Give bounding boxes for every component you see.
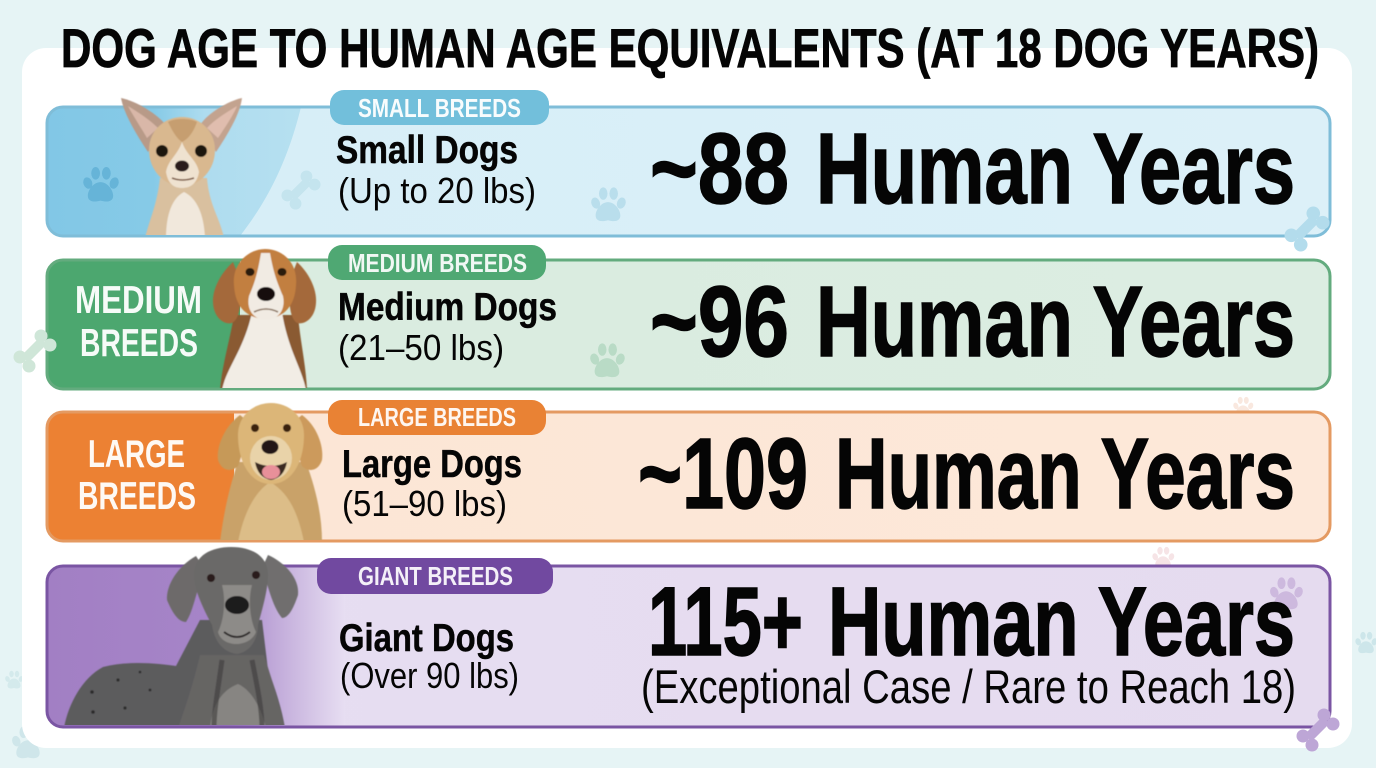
label: LARGE xyxy=(88,433,185,476)
pill: giant breeds xyxy=(317,558,553,594)
pill: small breeds: SMALL BREEDS xyxy=(358,93,521,123)
corner bone xyxy=(1285,207,1329,251)
label: MEDIUM xyxy=(75,279,202,322)
paw xyxy=(590,187,627,221)
background paw left xyxy=(4,671,24,688)
panel: small breeds xyxy=(47,90,1330,251)
faint paw above large row xyxy=(1232,397,1254,416)
bone xyxy=(281,170,321,210)
human years value: ~109 xyxy=(638,418,808,530)
icon: beagle xyxy=(213,249,316,390)
left colour block xyxy=(47,107,301,236)
faint paw above giant row xyxy=(1151,547,1175,568)
paw in colour block xyxy=(82,167,120,202)
pill: large breeds: LARGE BREEDS xyxy=(358,402,516,432)
corner bone xyxy=(1296,708,1340,752)
pill: large breeds xyxy=(328,400,546,435)
paw xyxy=(589,343,626,377)
human years value xyxy=(648,567,1295,676)
label: BREEDS xyxy=(80,322,198,365)
panel: giant breeds xyxy=(47,547,1340,752)
breed name: Large Dogs xyxy=(342,443,522,486)
row background xyxy=(47,107,1330,236)
breed name: Small Dogs xyxy=(336,129,518,172)
left colour block xyxy=(47,260,240,389)
weight range: (Over 90 lbs) xyxy=(340,655,519,696)
weight range: (51–90 lbs) xyxy=(342,483,507,524)
human years value xyxy=(638,418,1295,530)
icon: great dane xyxy=(64,547,298,728)
breed name: Medium Dogs xyxy=(338,286,557,329)
background paw bottom left xyxy=(11,726,46,758)
weight range: (21–50 lbs) xyxy=(338,327,504,368)
human years value: ~96 xyxy=(650,266,789,378)
human years value: ~88 xyxy=(650,113,789,225)
panel: large breeds xyxy=(47,400,1330,542)
pill: medium breeds: MEDIUM BREEDS xyxy=(348,248,527,278)
background paw right xyxy=(1354,632,1376,653)
label xyxy=(75,279,202,365)
row background xyxy=(47,412,1330,541)
weight range: (Up to 20 lbs) xyxy=(338,170,536,211)
icon: chihuahua xyxy=(121,98,242,238)
label xyxy=(78,433,196,518)
icon: golden retriever xyxy=(218,403,322,542)
pill: giant breeds: GIANT BREEDS xyxy=(358,561,513,591)
human years value: 115+ xyxy=(648,567,803,676)
paw xyxy=(1269,577,1304,609)
bone at left edge xyxy=(14,330,56,372)
panel: medium breeds xyxy=(14,245,1330,390)
row background xyxy=(47,566,1330,727)
human years value xyxy=(650,113,1295,225)
breed name: Giant Dogs xyxy=(339,617,514,660)
human years value xyxy=(650,266,1295,378)
row background xyxy=(47,260,1330,389)
left colour block xyxy=(47,412,234,541)
left colour block xyxy=(47,566,345,727)
label: BREEDS xyxy=(78,475,196,518)
